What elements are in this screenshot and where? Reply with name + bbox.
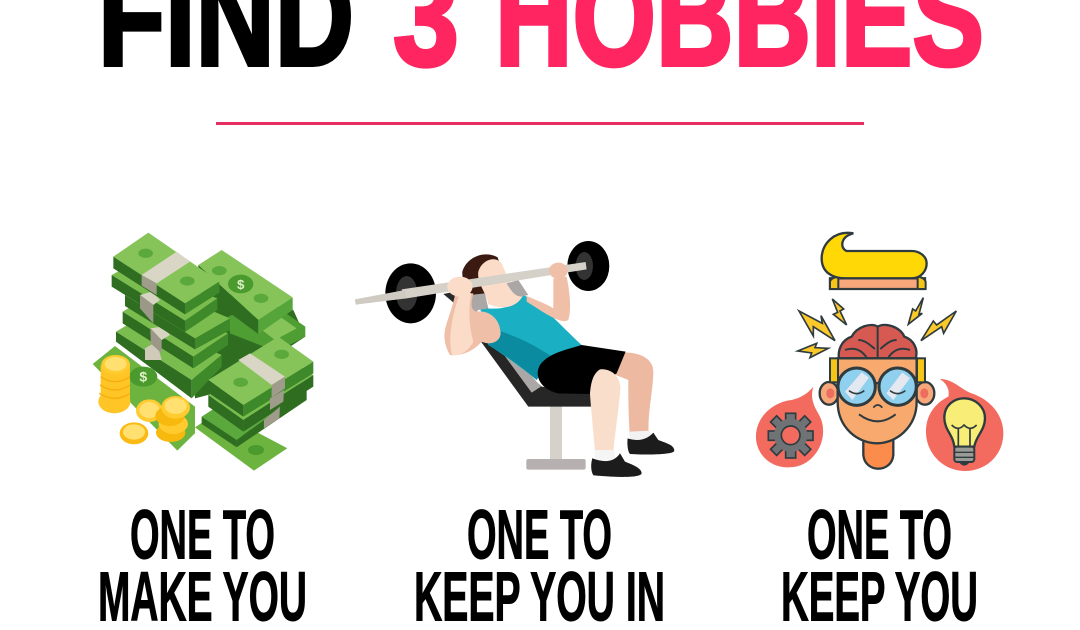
ears [820, 382, 838, 405]
title [98, 0, 984, 95]
top left bundle [113, 233, 219, 303]
nose and smile [873, 405, 882, 408]
column 1 caption: ONE TO [130, 496, 275, 574]
face [838, 358, 917, 443]
right front bundle [202, 372, 307, 440]
icon: head with open brain, gear and light bulb [756, 233, 1003, 471]
lightning bolts [798, 298, 956, 358]
brain [839, 325, 916, 358]
backing shadow between bundles [192, 287, 305, 398]
speech bubble with light bulb [926, 379, 1003, 471]
barbell [355, 241, 609, 323]
glasses [838, 368, 875, 405]
left bundle layers, bottom to top [116, 318, 222, 380]
flat bills [93, 346, 195, 451]
far arm [527, 277, 570, 321]
back right bundle [228, 300, 305, 352]
icon: money stacks and coins: $ [139, 369, 147, 385]
column 2 caption [414, 496, 665, 630]
neck [863, 438, 893, 469]
far leg [612, 352, 653, 437]
head and hair [462, 254, 502, 305]
icon: money stacks and coins: $ [237, 277, 245, 292]
icon: money stacks and coins [93, 233, 313, 471]
divider line [216, 122, 864, 125]
shorts [538, 345, 626, 394]
icon: person lifting barbell on incline bench [355, 241, 674, 477]
near leg [590, 369, 620, 452]
torso [480, 295, 582, 380]
bench [443, 292, 473, 317]
speech bubble with gear [756, 387, 823, 467]
hands [447, 277, 473, 297]
near arm [444, 293, 501, 355]
lifted skull cap [830, 278, 925, 289]
column 1 caption [98, 496, 307, 630]
column 3 caption: ONE TO [807, 496, 952, 574]
coins [101, 365, 130, 402]
column 2 caption: ONE TO [467, 496, 612, 574]
column 3 caption [781, 496, 978, 630]
